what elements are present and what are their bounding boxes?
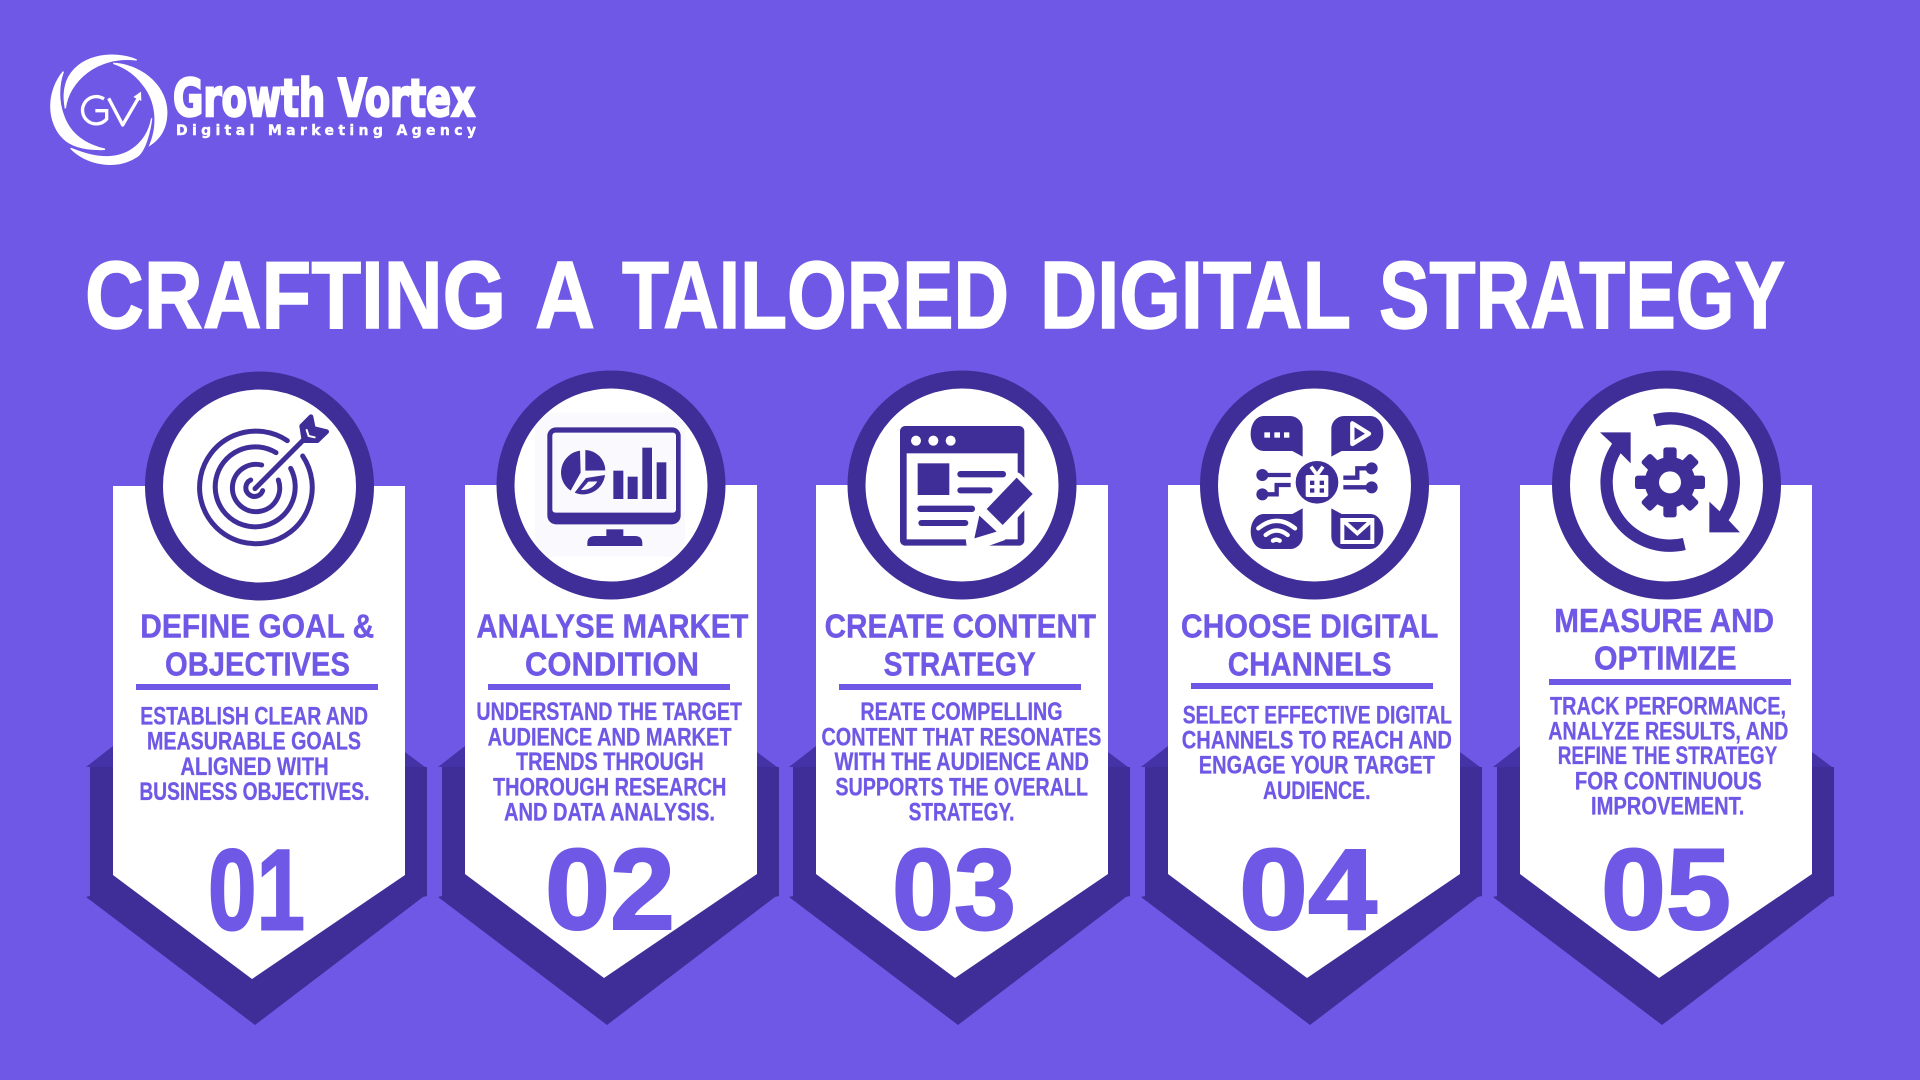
- body text: AUDIENCE AND MARKET: [488, 724, 732, 752]
- title: DIGITAL: [1040, 242, 1351, 349]
- body text: CONTENT THAT RESONATES: [822, 724, 1101, 752]
- heading: OBJECTIVES: [165, 646, 350, 683]
- heading: MEASURE AND: [1554, 602, 1774, 639]
- panel card: [816, 485, 1108, 978]
- icon: GV swirl: [51, 55, 167, 164]
- body text: FOR CONTINUOUS: [1575, 767, 1762, 795]
- heading: CHOOSE DIGITAL: [1181, 608, 1438, 644]
- body text: [139, 702, 369, 806]
- panel card: [113, 486, 405, 979]
- icon: gear with cycle arrows: [1561, 380, 1772, 590]
- title: [85, 242, 1785, 349]
- heading: [140, 608, 374, 683]
- body text: AND DATA ANALYSIS.: [504, 798, 715, 826]
- logo tagline: Digital Marketing Agency: [176, 123, 476, 139]
- body text: BUSINESS OBJECTIVES.: [139, 778, 369, 806]
- panel: step 01 define goal: [86, 380, 427, 1025]
- heading: ANALYSE MARKET: [476, 608, 748, 644]
- body text: REATE COMPELLING: [860, 698, 1063, 726]
- body text: SELECT EFFECTIVE DIGITAL: [1183, 701, 1452, 729]
- number 03: 03: [892, 826, 1016, 954]
- body text: UNDERSTAND THE TARGET: [476, 698, 742, 726]
- body text: ALIGNED WITH: [180, 753, 329, 781]
- number 02: 02: [545, 826, 675, 954]
- panel backing: [86, 746, 427, 1025]
- panel backing: [1141, 746, 1482, 1025]
- icon: target with arrow: [154, 380, 365, 592]
- body text: REFINE THE STRATEGY: [1558, 742, 1778, 770]
- heading: OPTIMIZE: [1594, 640, 1737, 677]
- body text: STRATEGY.: [909, 798, 1014, 826]
- heading: CHANNELS: [1228, 646, 1392, 683]
- panel card: [1520, 485, 1812, 978]
- title: CRAFTING: [85, 242, 506, 349]
- body text: IMPROVEMENT.: [1591, 792, 1744, 820]
- panel: step 03 create content: [789, 380, 1130, 1025]
- body text: SUPPORTS THE OVERALL: [835, 773, 1088, 801]
- title: STRATEGY: [1379, 242, 1785, 349]
- heading: STRATEGY: [884, 646, 1036, 683]
- heading: [476, 608, 748, 683]
- number 05: 05: [1601, 826, 1731, 954]
- title: A: [535, 242, 595, 349]
- panel card: [1168, 485, 1460, 978]
- body text: THOROUGH RESEARCH: [493, 773, 726, 801]
- panel: step 02 analyse market: [438, 380, 779, 1025]
- body text: [1548, 692, 1788, 820]
- body text: TRENDS THROUGH: [516, 748, 704, 776]
- icon: web page and pencil: [856, 380, 1068, 590]
- title: TAILORED: [622, 242, 1009, 349]
- logo: Growth Vortex: [51, 55, 476, 164]
- panel backing: [789, 746, 1130, 1025]
- body text: CHANNELS TO REACH AND: [1182, 726, 1452, 754]
- heading: [1181, 608, 1438, 683]
- heading: [1554, 602, 1774, 677]
- number 01: 01: [208, 826, 305, 954]
- number 04: 04: [1239, 826, 1377, 954]
- heading: CONDITION: [525, 646, 699, 683]
- body text: ANALYZE RESULTS, AND: [1548, 717, 1788, 745]
- panel: step 05 measure and optimize: [1493, 380, 1834, 1025]
- heading: [825, 608, 1096, 683]
- heading: DEFINE GOAL &: [140, 608, 374, 644]
- icon: monitor with charts: [506, 380, 716, 590]
- panel backing: [438, 746, 779, 1025]
- body text: TRACK PERFORMANCE,: [1550, 692, 1786, 720]
- panel: step 04 choose channels: [1141, 380, 1482, 1025]
- panel card: [465, 485, 757, 978]
- body text: [476, 698, 742, 826]
- icon: digital channels hub: [1209, 380, 1420, 590]
- body text: [822, 698, 1101, 826]
- heading: CREATE CONTENT: [825, 608, 1096, 644]
- body text: ENGAGE YOUR TARGET: [1199, 752, 1435, 780]
- logo name: Growth Vortex: [173, 69, 475, 129]
- body text: ESTABLISH CLEAR AND: [140, 702, 368, 730]
- body text: MEASURABLE GOALS: [147, 727, 361, 755]
- body text: AUDIENCE.: [1263, 777, 1371, 805]
- body text: WITH THE AUDIENCE AND: [834, 748, 1089, 776]
- body text: [1182, 701, 1452, 805]
- panel backing: [1493, 746, 1834, 1025]
